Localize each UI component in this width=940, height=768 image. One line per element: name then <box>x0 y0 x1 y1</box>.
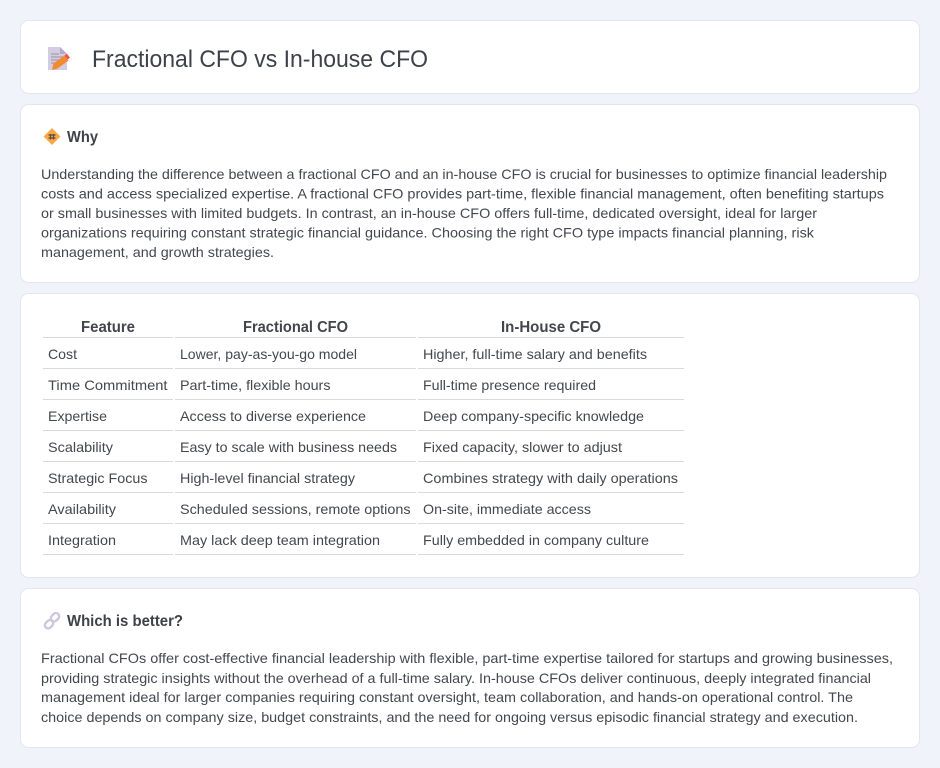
icon: chain link <box>44 612 61 630</box>
table row: expertise: Access to diverse experience <box>180 408 366 424</box>
text block: which is better: Fractional CFOs offer cost-effective financial leadership with flexible, part-time expertise tailored for startups and growing businesses, <box>41 650 893 666</box>
panel: comparison table <box>20 294 920 578</box>
table row: cost: Cost <box>48 346 77 362</box>
table row: integration: May lack deep team integration <box>180 532 380 548</box>
table row: availability: On-site, immediate access <box>423 501 591 517</box>
table row: cost: Lower, pay-as-you-go model <box>180 346 357 362</box>
panel: which is better <box>20 588 920 748</box>
heading: why: Why <box>67 129 98 146</box>
table header row <box>43 319 684 338</box>
text block: which is better: providing strategic insights without the overhead of a full-time salary. In-house CFOs deliver continuous, deeply integrated financial <box>41 670 871 686</box>
table row: time commitment <box>43 377 684 400</box>
table row: expertise <box>43 408 684 431</box>
table row: time commitment: Time Commitment <box>48 377 168 393</box>
table row: scalability: Easy to scale with business needs <box>180 439 397 455</box>
table header row: Fractional CFO <box>243 319 348 336</box>
table row: expertise: Expertise <box>48 408 107 424</box>
table row: cost: Higher, full-time salary and benefits <box>423 346 647 362</box>
table row: availability: Availability <box>48 501 116 517</box>
text block: why: management, and growth strategies. <box>41 244 274 260</box>
table row: strategic focus: High-level financial strategy <box>180 470 355 486</box>
heading: which is better: Which is better? <box>67 613 183 630</box>
table row: integration: Fully embedded in company culture <box>423 532 649 548</box>
icon: memo with pencil <box>48 47 70 70</box>
text block: which is better: management ideal for larger companies requiring constant oversight, team collaboration, and hands-on operational control. The <box>41 689 853 705</box>
panel: header <box>20 20 920 94</box>
table row: strategic focus <box>43 470 684 493</box>
icon: orange diamond sign <box>44 128 60 145</box>
text block: why: costs and access specialized expertise. A fractional CFO provides part-time, flexible financial management, often benefiting startups <box>41 186 884 202</box>
text block: why <box>41 166 887 260</box>
table header row: Feature <box>81 319 135 336</box>
text block: why: organizations requiring constant strategic financial guidance. Choosing the right CFO type impacts financial planning, risk <box>41 224 815 240</box>
table row: availability: Scheduled sessions, remote options <box>180 501 410 517</box>
table row: scalability <box>43 439 684 462</box>
table row: time commitment: Full-time presence required <box>423 377 596 393</box>
title: Fractional CFO vs In-house CFO <box>92 46 428 73</box>
table row: scalability: Scalability <box>48 439 113 455</box>
table row: strategic focus: Strategic Focus <box>48 470 148 486</box>
table row: cost <box>43 346 684 369</box>
panel: why <box>20 104 920 282</box>
table row: expertise: Deep company-specific knowledge <box>423 408 644 424</box>
text block: which is better: choice depends on company size, budget constraints, and the need for ongoing versus episodic financial strategy and execution. <box>41 709 858 725</box>
table row: integration <box>43 532 684 555</box>
table row: time commitment: Part-time, flexible hours <box>180 377 330 393</box>
table row: availability <box>43 501 684 524</box>
text block: which is better <box>41 650 893 725</box>
table header row: In-House CFO <box>501 319 601 336</box>
table row: strategic focus: Combines strategy with daily operations <box>423 470 678 486</box>
text block: why: Understanding the difference between a fractional CFO and an in-house CFO is crucial for businesses to optimize financial leadership <box>41 166 887 182</box>
table row: integration: Integration <box>48 532 116 548</box>
table row: scalability: Fixed capacity, slower to adjust <box>423 439 622 455</box>
text block: why: or small businesses with limited budgets. In contrast, an in-house CFO offers full-time, dedicated oversight, ideal for larger <box>41 205 817 221</box>
